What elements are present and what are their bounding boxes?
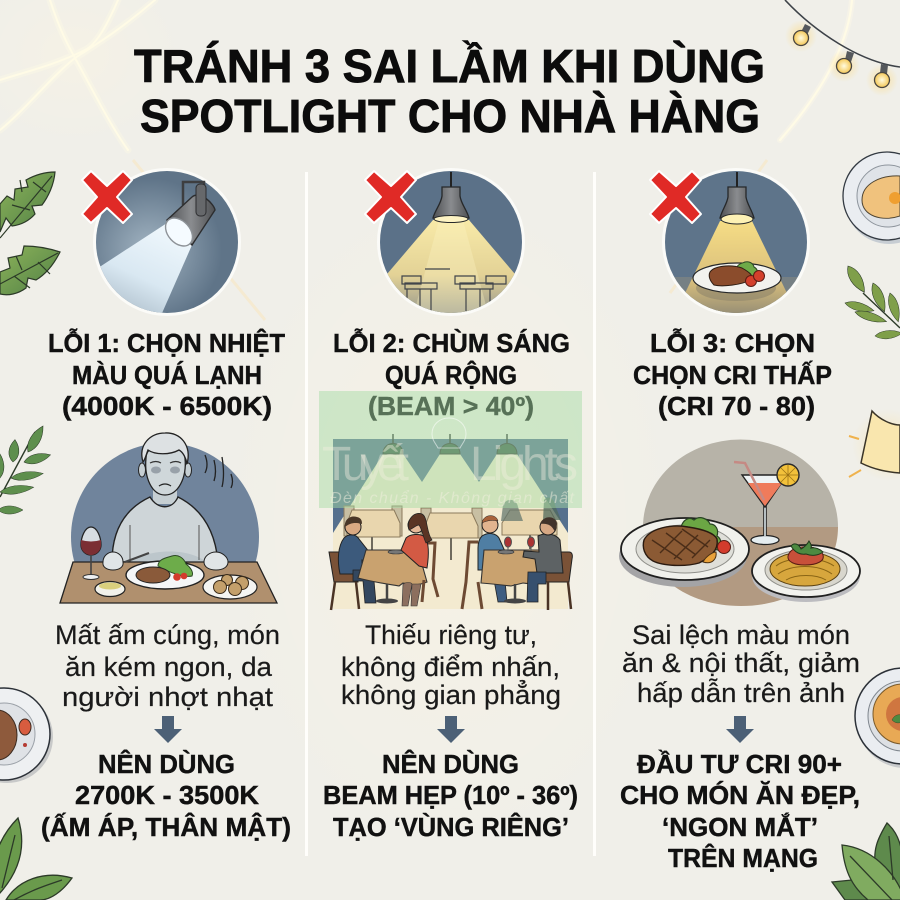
heading: LỖI 2: CHÙM SÁNG — [333, 328, 570, 358]
heading: LỖI 1: CHỌN NHIỆT — [48, 328, 285, 358]
watermark: Lights — [470, 438, 578, 491]
panel: lỗi 2 — [319, 168, 582, 842]
description — [622, 620, 860, 708]
heading: QUÁ RỘNG — [385, 360, 517, 390]
recommendation: NÊN DÙNG — [382, 749, 519, 779]
recommendation: ĐẦU TƯ CRI 90+ — [637, 749, 842, 779]
illustration: steak, cocktail, spaghetti — [619, 440, 860, 606]
watermark: Đèn chuẩn - Không gian chất — [330, 489, 575, 507]
arrow — [726, 716, 754, 743]
right group — [462, 542, 482, 609]
arrow — [154, 716, 182, 743]
icon: steak under pendant circle — [660, 168, 812, 320]
decorative leaves bottom right — [832, 823, 900, 900]
left chair and man — [329, 552, 358, 582]
recommendation: NÊN DÙNG — [98, 749, 235, 779]
cocktail — [734, 462, 799, 544]
description: không gian phẳng — [341, 678, 561, 710]
steak plate — [619, 518, 749, 587]
description: Mất ấm cúng, món — [55, 620, 280, 650]
description — [341, 620, 561, 710]
left table — [358, 550, 427, 586]
heading: (4000K - 6500K) — [62, 391, 272, 421]
title: TRÁNH 3 SAI LẦM KHI DÙNG — [134, 40, 765, 92]
recommendation: 2700K - 3500K — [75, 780, 259, 810]
heading: (CRI 70 - 80) — [658, 391, 815, 421]
lamps — [383, 434, 517, 454]
heading — [333, 328, 570, 421]
illustration: restaurant with wide beams — [329, 434, 572, 610]
watermark: Tuyết — [322, 438, 409, 491]
recommendation: TẠO ‘VÙNG RIÊNG’ — [333, 812, 569, 842]
heading: (BEAM > 40º) — [368, 391, 534, 421]
description: Thiếu riêng tư, — [365, 620, 537, 650]
recommendation: ‘NGON MẮT’ — [662, 812, 818, 842]
icon: red cross — [365, 171, 416, 223]
far tables — [344, 506, 557, 538]
heading: MÀU QUÁ LẠNH — [72, 360, 262, 390]
decorative leaves top-left — [0, 172, 60, 295]
heading: LỖI 3: CHỌN — [650, 328, 815, 358]
recommendation: BEAM HẸP (10º - 36º) — [323, 780, 578, 810]
watermark — [319, 391, 582, 508]
arrow — [437, 716, 465, 743]
recommendation: (ẤM ÁP, THÂN MẬT) — [41, 812, 291, 842]
description: hấp dẫn trên ảnh — [637, 677, 845, 708]
heading — [633, 328, 832, 421]
icon: wide beam circle — [377, 168, 525, 316]
icon: red cross — [650, 171, 701, 223]
heading — [48, 328, 285, 421]
icon: cold spotlight circle — [93, 168, 241, 316]
decorative plate: top right — [843, 152, 900, 244]
description: người nhợt nhạt — [62, 682, 274, 712]
description: không điểm nhấn, — [341, 652, 560, 682]
heading: CHỌN CRI THẤP — [633, 360, 832, 390]
decorative leaves bottom-left — [0, 818, 72, 900]
string lights — [785, 0, 900, 96]
decorative leaves right — [843, 263, 900, 340]
icon: red cross — [82, 171, 132, 223]
recommendation — [41, 749, 291, 842]
right chair and woman — [422, 543, 438, 602]
illustration: pale diner at table — [60, 433, 277, 603]
decorative napkin with glow — [849, 409, 900, 481]
title — [134, 40, 765, 142]
decorative plate: left — [0, 688, 53, 783]
spaghetti plate — [752, 541, 860, 602]
panel: lỗi 1 — [41, 168, 291, 842]
description: ăn & nội thất, giảm — [622, 648, 860, 678]
panel: lỗi 3 — [619, 168, 860, 873]
title: SPOTLIGHT CHO NHÀ HÀNG — [140, 90, 760, 142]
recommendation: CHO MÓN ĂN ĐẸP, — [620, 780, 860, 810]
column dividers — [305, 172, 596, 856]
recommendation — [620, 749, 860, 873]
description: ăn kém ngon, da — [65, 652, 273, 682]
description — [55, 620, 280, 712]
recommendation: TRÊN MẠNG — [668, 843, 818, 873]
decorative leaves mid-left — [0, 424, 52, 514]
decorative plate: right bottom — [855, 668, 900, 768]
recommendation — [323, 749, 578, 842]
description: Sai lệch màu món — [632, 620, 850, 650]
